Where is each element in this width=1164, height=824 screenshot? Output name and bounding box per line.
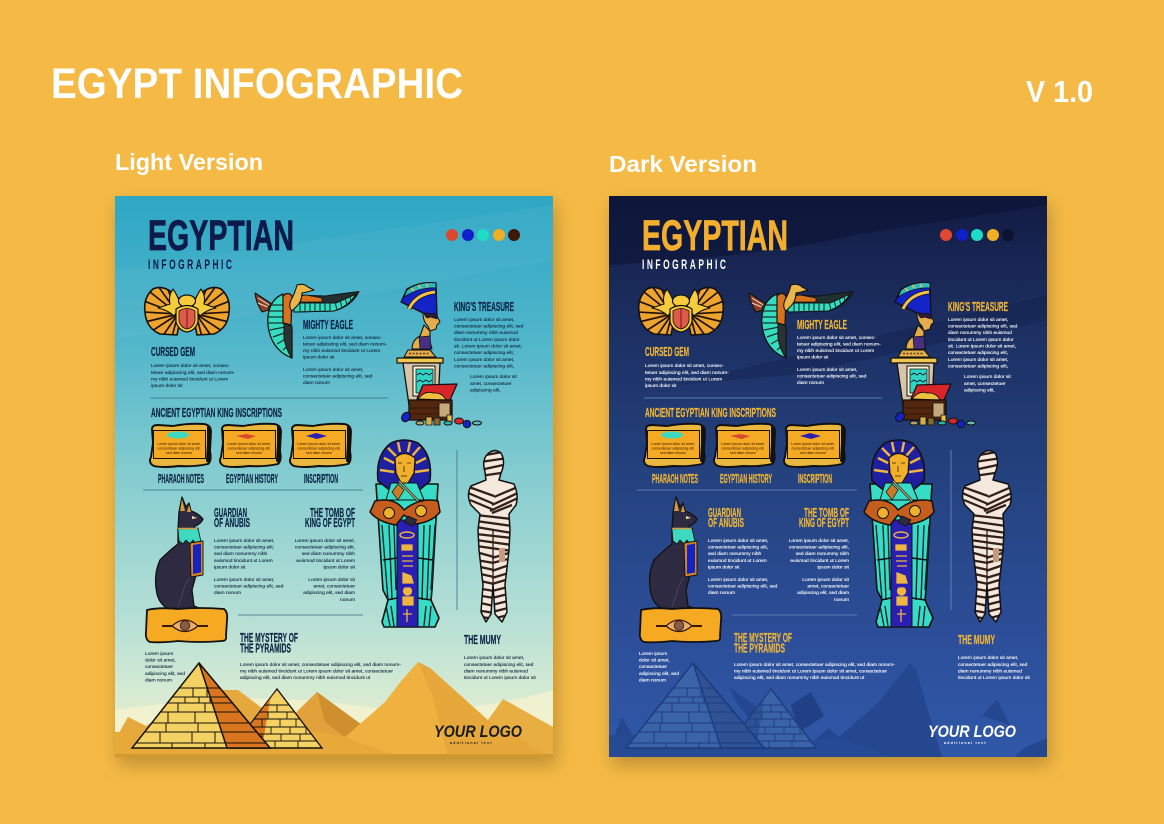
text: under eye tablet: diam nonum	[639, 678, 666, 684]
heading: tomb of king of egypt: THE TOMB OF	[804, 506, 849, 520]
heading: guardian of anubis	[708, 506, 744, 530]
heading: dark version: Dark Version	[609, 151, 757, 177]
tablet: inscription: consectetuer adipiscing elit,	[792, 446, 835, 450]
text: the mumy: consectetuer adipiscing elit, sed	[958, 662, 1028, 668]
heading: tomb of king of egypt	[305, 506, 355, 530]
text: king's treasure: Lorem ipsum dolor sit	[964, 374, 1011, 380]
heading: king's treasure: KING'S TREASURE	[948, 300, 1008, 314]
tablet: pharaoh notes: consectetuer adipiscing elit,	[652, 446, 695, 450]
text: guardian of anubis: Lorem ipsum dolor sit amet,	[214, 538, 274, 544]
heading: guardian of anubis: OF ANUBIS	[214, 516, 250, 530]
tablet: pharaoh notes	[644, 424, 705, 467]
panel: light version: PHARAOH NOTES	[158, 472, 204, 486]
text: king's treasure: Lorem ipsum dolor sit amet,	[454, 357, 514, 363]
tablet: egyptian history: sed diam nonum	[236, 451, 262, 455]
text: mystery of the pyramids: adipiscing elit, sed diam nonummy nibh euismod tincidunt ut	[240, 675, 371, 681]
heading: cursed gem: CURSED GEM	[645, 345, 689, 359]
heading: guardian of anubis: GUARDIAN	[708, 506, 741, 520]
text: king's treasure: adipiscing elit,	[964, 388, 995, 394]
text: king's treasure: sit. Lorem ipsum dolor sit amet,	[454, 344, 522, 350]
icon: scarab	[637, 285, 725, 337]
tablet: egyptian history	[714, 424, 775, 467]
tablet: egyptian history: consectetuer adipiscing elit,	[722, 446, 765, 450]
text: guardian of anubis: euismod tincidunt ut Lorem	[214, 558, 273, 564]
logo: additional text	[944, 741, 987, 745]
logo: YOUR LOGO	[928, 722, 1016, 741]
text: cursed gem: ipsum dolor sit	[151, 383, 183, 389]
text: tomb of king of egypt: sed diam nonummy nibh	[302, 551, 355, 557]
tablet: inscription	[290, 424, 351, 467]
text: king's treasure: consectetuer adipiscing elit,	[948, 350, 1008, 356]
panel title: EGYPTIAN	[148, 212, 294, 260]
text: the mumy: Lorem ipsum dolor sit amet,	[464, 655, 524, 661]
text: tomb of king of egypt: euismod tincidunt ut Lorem	[296, 558, 355, 564]
text: the mumy: consectetuer adipiscing elit, sed	[464, 662, 534, 668]
tablet: inscription: sed diam nonum	[306, 451, 332, 455]
heading: guardian of anubis: GUARDIAN	[214, 506, 247, 520]
text: under eye tablet: dolor sit amet,	[639, 658, 670, 664]
text: tomb of king of egypt: sed diam nonummy nibh	[796, 551, 849, 557]
text: mighty eagle: Lorem ipsum dolor sit amet, consec-	[797, 335, 876, 341]
text: tomb of king of egypt: euismod tincidunt ut Lorem	[790, 558, 849, 564]
tablet: egyptian history: consectetuer adipiscing elit,	[228, 446, 271, 450]
text: tomb of king of egypt: nonum	[834, 598, 849, 603]
text: under eye tablet: consectetuer	[145, 664, 173, 670]
icon: queen bust and treasure	[397, 283, 482, 428]
text: guardian of anubis: diam nonum	[708, 590, 735, 596]
text: mighty eagle: Lorem ipsum dolor sit amet, consec-	[303, 335, 382, 341]
icon: eagle	[749, 284, 853, 358]
text: guardian of anubis: sed diam nonummy nibh	[214, 551, 268, 557]
logo: YOUR LOGO	[434, 722, 522, 741]
tablet: inscription	[784, 424, 845, 467]
text: king's treasure: diam nonummy nibh euismod	[948, 330, 1012, 336]
heading: guardian of anubis	[214, 506, 250, 530]
text: mighty eagle: Lorem ipsum dolor sit amet,	[797, 367, 857, 373]
tablet: pharaoh notes	[150, 424, 211, 467]
text: guardian of anubis: consectetuer adipiscing elit,	[214, 544, 274, 550]
text: cursed gem: Lorem ipsum dolor sit amet, consec-	[151, 363, 230, 369]
text: king's treasure: consectetuer adipiscing elit, sed	[454, 324, 524, 330]
tablet: inscription: consectetuer adipiscing elit,	[298, 446, 341, 450]
text: king's treasure: consectetuer adipiscing elit,	[948, 364, 1008, 370]
panel: dark version: PHARAOH NOTES	[652, 472, 698, 486]
heading: guardian of anubis: OF ANUBIS	[708, 516, 744, 530]
text: guardian of anubis: Lorem ipsum dolor sit amet,	[708, 538, 768, 544]
panel: light version: INSCRIPTION	[304, 472, 338, 486]
heading: mystery of the pyramids: THE MYSTERY OF	[240, 631, 298, 645]
heading: mystery of the pyramids: THE PYRAMIDS	[240, 642, 291, 656]
text: tomb of king of egypt: Lorem ipsum dolor sit amet,	[789, 538, 849, 544]
icon: eye tablet	[146, 608, 227, 642]
tablet: inscription: Lorem ipsum dolor sit amet,	[297, 442, 341, 446]
text: guardian of anubis: consectetuer adipiscing elit, sed	[708, 584, 778, 590]
text: under eye tablet: Lorem ipsum	[145, 651, 173, 657]
heading: king's treasure: KING'S TREASURE	[454, 300, 514, 314]
text: the mumy: diam nonummy nibh euismod	[464, 668, 528, 674]
heading: tomb of king of egypt: THE TOMB OF	[310, 506, 355, 520]
text: cursed gem: ipsum dolor sit	[645, 383, 677, 389]
heading: mystery of the pyramids: THE PYRAMIDS	[734, 642, 785, 656]
heading: mystery of the pyramids	[734, 631, 792, 656]
panel: dark version: INSCRIPTION	[798, 472, 832, 486]
text: king's treasure: Lorem ipsum dolor sit amet,	[948, 317, 1008, 323]
text: tomb of king of egypt: Lorem ipsum dolor sit amet,	[295, 538, 355, 544]
text: mighty eagle: consectetuer adipiscing elit, sed	[797, 374, 867, 380]
text: tomb of king of egypt: adipiscing elit, sed diam	[303, 590, 355, 596]
text: tomb of king of egypt: ipsum dolor sit	[817, 564, 850, 570]
heading: king inscriptions: ANCIENT EGYPTIAN KING INSCRIPTIONS	[645, 406, 776, 420]
icon: eye tablet	[640, 608, 721, 642]
version label: V 1.0	[1026, 74, 1093, 109]
text: king's treasure: Lorem ipsum dolor sit amet,	[948, 357, 1008, 363]
text: mystery of the pyramids: adipiscing elit, sed diam nonummy nibh euismod tincidunt ut	[734, 675, 865, 681]
heading: the mumy: THE MUMY	[958, 633, 995, 647]
text: king's treasure: sit. Lorem ipsum dolor sit amet,	[948, 344, 1016, 350]
heading: tomb of king of egypt	[799, 506, 849, 530]
colour palette dots	[446, 229, 520, 241]
text: the mumy: tincidunt ut Lorem ipsum dolor sit	[464, 675, 536, 681]
text: king's treasure: consectetuer adipiscing elit, sed	[948, 324, 1018, 330]
panel subtitle: INFOGRAPHIC	[642, 258, 728, 273]
icon: mummy	[466, 451, 520, 622]
tablet: pharaoh notes: consectetuer adipiscing elit,	[158, 446, 201, 450]
text: cursed gem: my nibh euismod tincidunt ut Lorem	[645, 376, 722, 382]
text: mighty eagle: ipsum dolor sit	[797, 354, 829, 360]
heading: mighty eagle: MIGHTY EAGLE	[797, 318, 847, 332]
text: king's treasure: tincidunt ut Lorem ipsum dolor	[454, 337, 520, 343]
icon: eagle	[255, 284, 359, 358]
tablet: egyptian history: Lorem ipsum dolor sit amet,	[227, 442, 271, 446]
text: tomb of king of egypt: amet, consectetuer	[313, 584, 355, 590]
heading: cursed gem: CURSED GEM	[151, 345, 195, 359]
tablet: pharaoh notes: sed diam nonum	[166, 451, 192, 455]
tablet: inscription: sed diam nonum	[800, 451, 826, 455]
text: mystery of the pyramids: my nibh euismod tincidunt ut Lorem ipsum dolor sit amet, consectetuer	[734, 668, 887, 674]
text: king's treasure: diam nonummy nibh euismod	[454, 330, 518, 336]
panel subtitle: INFOGRAPHIC	[148, 258, 234, 273]
text: guardian of anubis: diam nonum	[214, 590, 241, 596]
text: under eye tablet: adipiscing elit, sed	[145, 671, 185, 677]
icon: queen bust and treasure	[891, 283, 976, 428]
text: guardian of anubis: consectetuer adipiscing elit,	[708, 544, 768, 550]
icon: sarcophagus	[864, 440, 934, 627]
text: mighty eagle: tetuer adipiscing elit, sed diam nonum-	[303, 342, 387, 348]
panel: light version: EGYPTIAN HISTORY	[226, 472, 278, 486]
colour palette dots	[940, 229, 1014, 241]
text: guardian of anubis: Lorem ipsum dolor sit amet,	[214, 577, 274, 583]
text: king's treasure: Lorem ipsum dolor sit	[470, 374, 517, 380]
panel: dark version	[609, 196, 1047, 757]
text: guardian of anubis: Lorem ipsum dolor sit amet,	[708, 577, 768, 583]
heading: tomb of king of egypt: KING OF EGYPT	[799, 516, 849, 530]
text: guardian of anubis: consectetuer adipiscing elit, sed	[214, 584, 284, 590]
icon: mummy	[960, 451, 1014, 622]
tablet: egyptian history: Lorem ipsum dolor sit amet,	[721, 442, 765, 446]
tablet: egyptian history	[220, 424, 281, 467]
text: tomb of king of egypt: Lorem ipsum dolor sit	[308, 577, 356, 583]
text: king's treasure: tincidunt ut Lorem ipsum dolor	[948, 337, 1014, 343]
text: mighty eagle: my nibh euismod tincidunt ut Lorem	[303, 348, 380, 354]
tablet: pharaoh notes: Lorem ipsum dolor sit amet,	[157, 442, 201, 446]
text: king's treasure: amet, consectetuer	[964, 381, 1006, 387]
text: mighty eagle: ipsum dolor sit	[303, 354, 335, 360]
text: mighty eagle: consectetuer adipiscing elit, sed	[303, 374, 373, 380]
tablet: egyptian history: sed diam nonum	[730, 451, 756, 455]
tablet: pharaoh notes: sed diam nonum	[660, 451, 686, 455]
text: king's treasure: consectetuer adipiscing elit,	[454, 364, 514, 370]
text: under eye tablet: Lorem ipsum	[639, 651, 667, 657]
logo: additional text	[450, 741, 493, 745]
text: tomb of king of egypt: nonum	[340, 598, 355, 603]
text: king's treasure: Lorem ipsum dolor sit amet,	[454, 317, 514, 323]
text: mighty eagle: my nibh euismod tincidunt ut Lorem	[797, 348, 874, 354]
tablet: inscription: Lorem ipsum dolor sit amet,	[791, 442, 835, 446]
text: under eye tablet: adipiscing elit, sed	[639, 671, 679, 677]
text: the mumy: diam nonummy nibh euismod	[958, 668, 1022, 674]
heading: light version: Light Version	[115, 149, 263, 175]
text: cursed gem: tetuer adipiscing elit, sed diam nonum-	[645, 370, 729, 376]
text: mystery of the pyramids: Lorem ipsum dolor sit amet, consectetuer adipiscing elit, sed diam nonum-	[240, 662, 401, 668]
text: tomb of king of egypt: consectetuer adipiscing elit,	[295, 544, 355, 550]
icon: pyramids	[130, 663, 330, 748]
heading: king inscriptions: ANCIENT EGYPTIAN KING INSCRIPTIONS	[151, 406, 282, 420]
tablet: pharaoh notes: Lorem ipsum dolor sit amet,	[651, 442, 695, 446]
heading: mystery of the pyramids: THE MYSTERY OF	[734, 631, 792, 645]
panel: dark version: EGYPTIAN HISTORY	[720, 472, 772, 486]
text: king's treasure: consectetuer adipiscing elit,	[454, 350, 514, 356]
text: mighty eagle: diam nonum	[797, 380, 824, 386]
text: tomb of king of egypt: Lorem ipsum dolor sit	[802, 577, 850, 583]
icon: anubis cat	[650, 497, 697, 611]
panel title: EGYPTIAN	[642, 212, 788, 260]
text: tomb of king of egypt: ipsum dolor sit	[323, 564, 356, 570]
main title: EGYPT INFOGRAPHIC	[51, 60, 463, 108]
text: cursed gem: tetuer adipiscing elit, sed diam nonum-	[151, 370, 235, 376]
text: mystery of the pyramids: my nibh euismod tincidunt ut Lorem ipsum dolor sit amet, consectetuer	[240, 668, 393, 674]
text: mighty eagle: diam nonum	[303, 380, 330, 386]
heading: tomb of king of egypt: KING OF EGYPT	[305, 516, 355, 530]
text: king's treasure: adipiscing elit,	[470, 388, 501, 394]
heading: mystery of the pyramids	[240, 631, 298, 656]
panel shadows	[118, 204, 1050, 765]
heading: the mumy: THE MUMY	[464, 633, 501, 647]
icon: anubis cat	[156, 497, 203, 611]
text: the mumy: Lorem ipsum dolor sit amet,	[958, 655, 1018, 661]
text: king's treasure: amet, consectetuer	[470, 381, 512, 387]
text: mystery of the pyramids: Lorem ipsum dolor sit amet, consectetuer adipiscing elit, sed diam nonum-	[734, 662, 895, 668]
text: guardian of anubis: sed diam nonummy nibh	[708, 551, 762, 557]
icon: sarcophagus	[370, 440, 440, 627]
heading: mighty eagle: MIGHTY EAGLE	[303, 318, 353, 332]
text: guardian of anubis: ipsum dolor sit	[708, 564, 740, 570]
icon: pyramids	[624, 663, 824, 748]
text: cursed gem: my nibh euismod tincidunt ut Lorem	[151, 376, 228, 382]
text: guardian of anubis: euismod tincidunt ut Lorem	[708, 558, 767, 564]
text: under eye tablet: diam nonum	[145, 678, 172, 684]
text: under eye tablet: dolor sit amet,	[145, 658, 176, 664]
panel: light version	[115, 196, 553, 757]
text: tomb of king of egypt: amet, consectetuer	[807, 584, 849, 590]
text: the mumy: tincidunt ut Lorem ipsum dolor sit	[958, 675, 1030, 681]
text: tomb of king of egypt: adipiscing elit, sed diam	[797, 590, 849, 596]
text: tomb of king of egypt: consectetuer adipiscing elit,	[789, 544, 849, 550]
text: cursed gem: Lorem ipsum dolor sit amet, consec-	[645, 363, 724, 369]
text: mighty eagle: tetuer adipiscing elit, sed diam nonum-	[797, 342, 881, 348]
icon: scarab	[143, 285, 231, 337]
text: guardian of anubis: ipsum dolor sit	[214, 564, 246, 570]
text: under eye tablet: consectetuer	[639, 664, 667, 670]
text: mighty eagle: Lorem ipsum dolor sit amet,	[303, 367, 363, 373]
